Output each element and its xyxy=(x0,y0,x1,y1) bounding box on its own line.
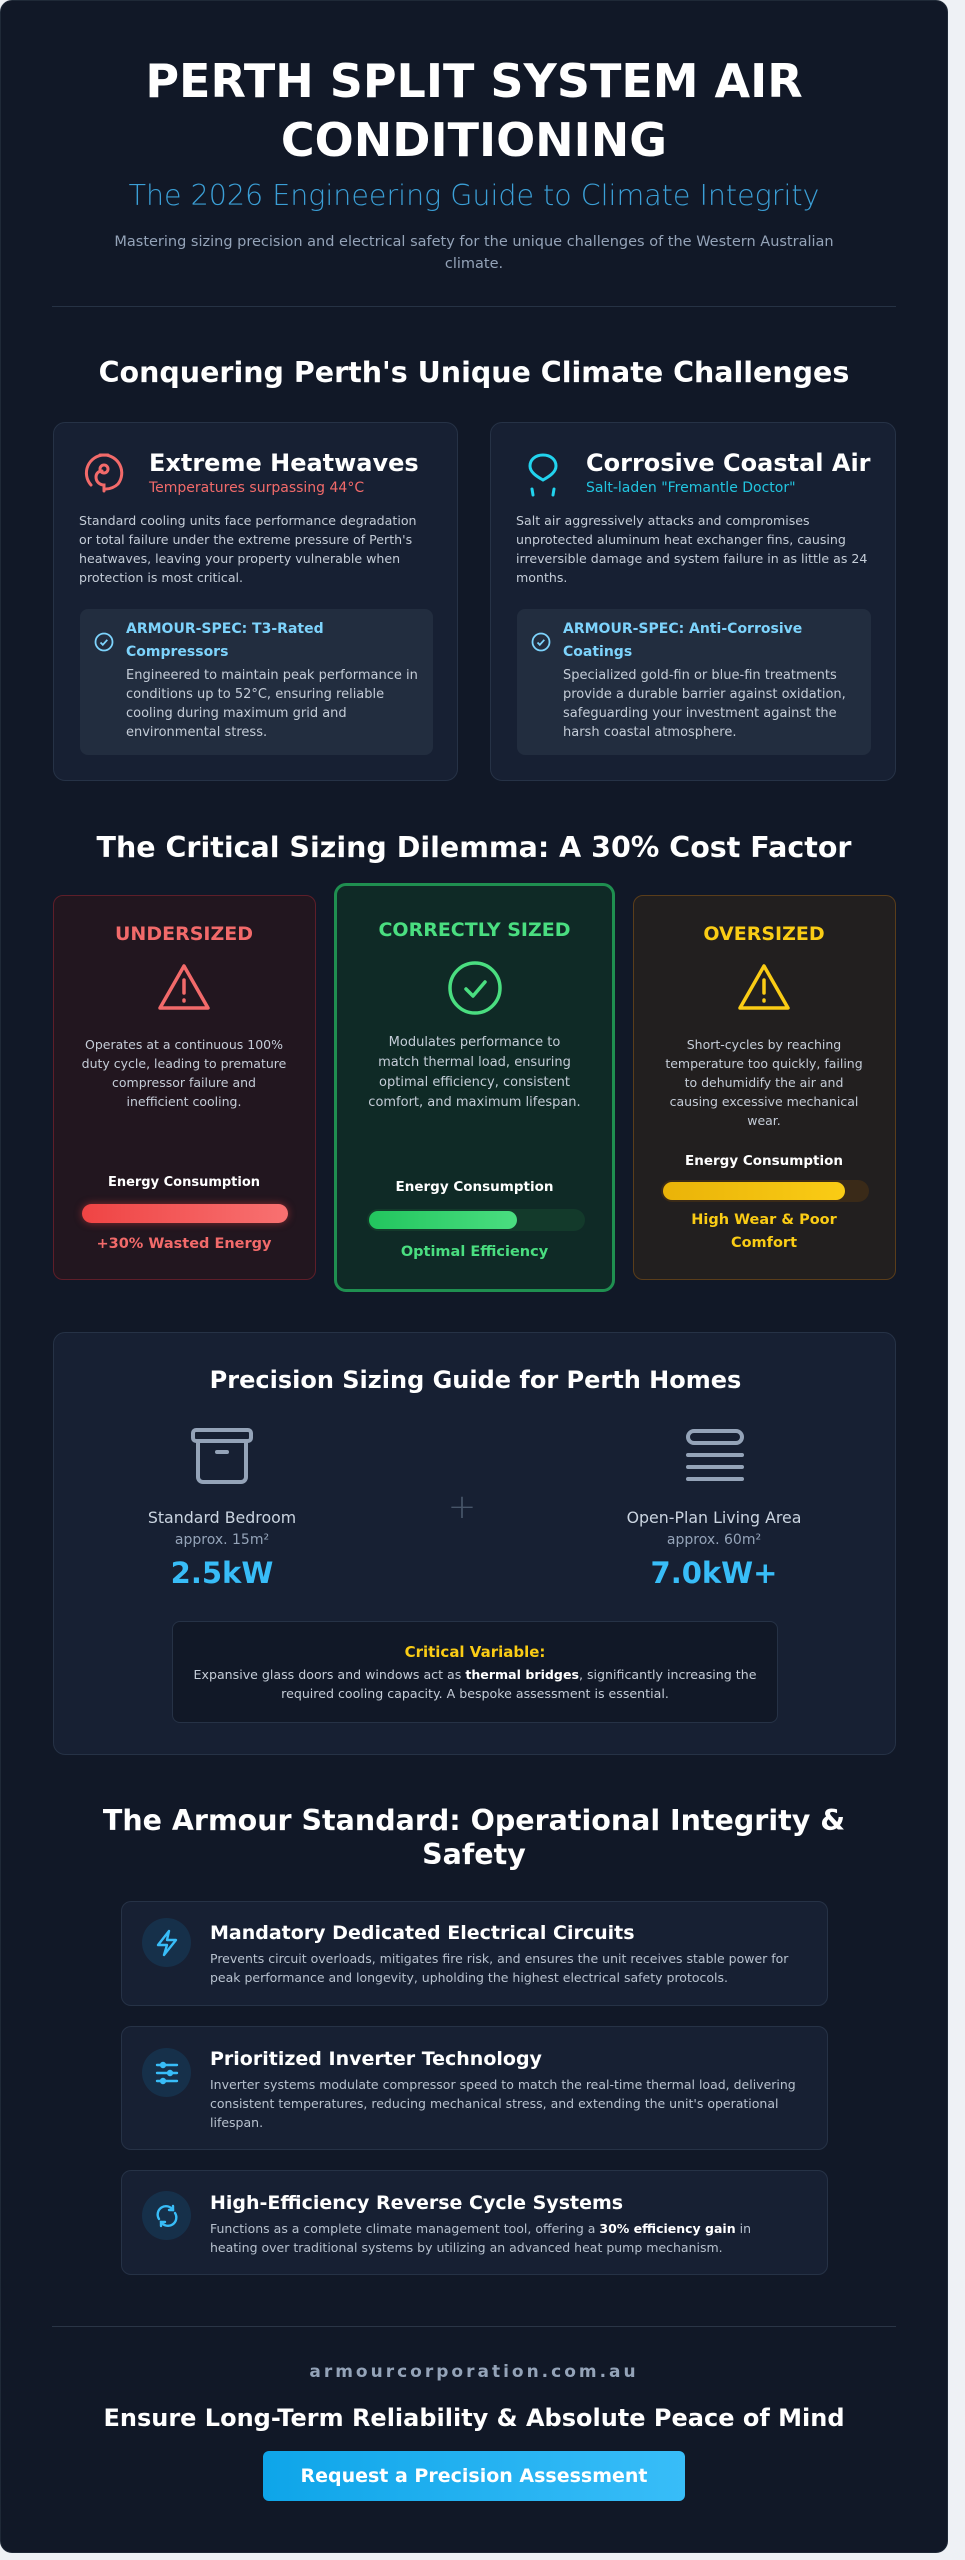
spec box: ARMOUR-SPEC: Anti-Corrosive xyxy=(563,621,802,637)
heading: armour standard: The Armour Standard: Operational Integrity & xyxy=(103,1804,845,1837)
spec box: Compressors xyxy=(126,644,228,660)
callout: critical variable xyxy=(172,1621,778,1723)
title: PERTH SPLIT SYSTEM AIR xyxy=(145,54,803,108)
panel: extreme heatwaves xyxy=(53,422,458,781)
panel: undersized: Operates at a continuous 100% xyxy=(85,1037,283,1052)
panel: reverse cycle: High-Efficiency Reverse Cycle Systems xyxy=(210,2192,623,2214)
spec box: provide a durable barrier against oxidation, xyxy=(563,687,846,702)
panel: undersized: inefficient cooling. xyxy=(127,1094,241,1109)
panel: undersized: compressor failure and xyxy=(112,1075,256,1090)
heading: Corrosive Coastal Air xyxy=(586,449,871,477)
panel: correctly sized: Modulates performance to xyxy=(389,1035,560,1050)
panel: dedicated circuits xyxy=(121,1901,828,2006)
panel: dedicated circuits: Mandatory Dedicated Electrical Circuits xyxy=(210,1922,635,1944)
panel: reverse cycle xyxy=(121,2170,828,2275)
spec box: Specialized gold-fin or blue-fin treatments xyxy=(563,668,837,683)
spec box xyxy=(80,609,433,755)
heading: armour standard xyxy=(103,1804,845,1871)
panel: oversized: OVERSIZED xyxy=(703,923,825,945)
heading: Precision Sizing Guide for Perth Homes xyxy=(210,1366,741,1394)
callout: critical variable: required cooling capacity. A bespoke assessment is essential. xyxy=(281,1686,669,1701)
title xyxy=(145,54,803,167)
bar: undersized energy xyxy=(82,1204,288,1223)
heading: sizing dilemma: The Critical Sizing Dilemma: A 30% Cost Factor xyxy=(96,831,851,864)
panel: undersized: duty cycle, leading to premature xyxy=(82,1056,286,1071)
panel: correctly sized: comfort, and maximum lifespan. xyxy=(368,1095,581,1110)
subtitle: The 2026 Engineering Guide to Climate Integrity xyxy=(129,179,819,212)
text: irreversible damage and system failure in as little as 24 xyxy=(516,551,867,566)
panel: oversized: causing excessive mechanical xyxy=(670,1094,858,1109)
text xyxy=(79,513,417,585)
bar: correct energy xyxy=(367,1209,585,1231)
subheading: Salt-laden "Fremantle Doctor" xyxy=(586,480,796,496)
website url: armourcorporation.com.au xyxy=(309,2362,639,2382)
title: CONDITIONING xyxy=(281,113,667,167)
text: months. xyxy=(516,570,567,585)
icon: sliders xyxy=(142,2048,191,2097)
icon: coastal xyxy=(528,454,558,496)
callout: critical variable: Critical Variable: xyxy=(405,1643,545,1661)
panel: correctly sized: Optimal Efficiency xyxy=(401,1244,548,1260)
panel: reverse cycle: Functions as a complete climate management tool, offering a 30% efficiency gain in xyxy=(210,2221,751,2236)
closing tagline: Ensure Long-Term Reliability & Absolute Peace of Mind xyxy=(103,2404,844,2432)
spec box: Coatings xyxy=(563,644,632,660)
text: Salt air aggressively attacks and compromises xyxy=(516,513,810,528)
panel: inverter technology: Prioritized Inverter Technology xyxy=(210,2048,542,2070)
icon: check xyxy=(94,632,114,652)
subheading: Temperatures surpassing 44°C xyxy=(149,480,364,496)
icon: check xyxy=(532,632,550,652)
panel: inverter technology: consistent temperatures, reducing mechanical stress, and extending the unit's operational xyxy=(210,2096,778,2111)
button xyxy=(263,2451,685,2501)
spec box: ARMOUR-SPEC: T3-Rated xyxy=(126,621,324,637)
spec box: conditions up to 52°C, ensuring reliable xyxy=(126,687,384,702)
icon: lightning xyxy=(142,1918,191,1967)
panel: oversized: Comfort xyxy=(731,1235,797,1251)
panel: inverter technology: Inverter systems modulate compressor speed to match the real-time thermal load, delivering xyxy=(210,2077,796,2092)
spec box: cooling during maximum grid and xyxy=(126,706,347,721)
panel: correctly sized: optimal efficiency, consistent xyxy=(379,1075,570,1090)
callout: critical variable: Expansive glass doors and windows act as thermal bridges, significantly increasing the xyxy=(194,1667,756,1682)
panel: dedicated circuits: Prevents circuit overloads, mitigates fire risk, and ensures the unit receives stable power for xyxy=(210,1951,788,1966)
spec box: Engineered to maintain peak performance in xyxy=(126,668,418,683)
panel: undersized: +30% Wasted Energy xyxy=(96,1236,272,1252)
icon: warning xyxy=(738,964,790,1010)
text: heatwaves, leaving your property vulnerable when xyxy=(79,551,400,566)
bedroom stats xyxy=(148,1508,296,1590)
panel: inverter technology xyxy=(121,2026,828,2150)
heading: Extreme Heatwaves xyxy=(149,449,419,477)
bar: oversized energy xyxy=(661,1180,869,1202)
heading: armour standard: Safety xyxy=(422,1838,526,1871)
spec box: safeguarding your investment against the xyxy=(563,706,837,721)
text xyxy=(516,513,867,585)
intro text xyxy=(114,234,834,272)
panel: corrosive coastal air xyxy=(490,422,896,781)
panel: undersized: UNDERSIZED xyxy=(115,923,253,945)
icon: living area xyxy=(686,1429,744,1481)
intro text: Mastering sizing precision and electrical safety for the unique challenges of the Western Australian xyxy=(114,234,834,250)
heading: climate challenges: Conquering Perth's Unique Climate Challenges xyxy=(99,356,849,389)
button: Request a Precision Assessment xyxy=(300,2465,648,2487)
icon: check circle xyxy=(448,961,502,1015)
panel: correctly sized: Energy Consumption xyxy=(396,1179,553,1195)
panel: correctly sized: CORRECTLY SIZED xyxy=(378,919,571,941)
panel: oversized: to dehumidify the air and xyxy=(685,1075,843,1090)
panel: undersized: Energy Consumption xyxy=(108,1175,260,1190)
panel: oversized: wear. xyxy=(747,1113,781,1128)
text: protection is most critical. xyxy=(79,570,243,585)
panel: oversized: Energy Consumption xyxy=(685,1153,843,1169)
panel: precision sizing guide xyxy=(53,1332,896,1755)
text: or total failure under the extreme pressure of Perth's xyxy=(79,532,412,547)
living area stats: 7.0kW+ xyxy=(651,1556,777,1590)
text: unprotected aluminum heat exchanger fins, causing xyxy=(516,532,846,547)
spec box xyxy=(517,609,871,755)
panel: correctly sized: match thermal load, ensuring xyxy=(378,1055,571,1070)
spec box: environmental stress. xyxy=(126,725,267,740)
panel: inverter technology: lifespan. xyxy=(210,2115,263,2130)
text: Standard cooling units face performance degradation xyxy=(79,513,417,528)
icon: heat xyxy=(84,454,124,492)
icon: bedroom xyxy=(191,1428,253,1484)
living area stats: Open-Plan Living Area xyxy=(627,1508,801,1527)
panel: reverse cycle: heating over traditional systems by utilizing an advanced heat pump mechanism. xyxy=(210,2240,723,2255)
icon: plus: + xyxy=(448,1487,476,1527)
spec box: harsh coastal atmosphere. xyxy=(563,725,736,740)
living area stats xyxy=(627,1508,801,1590)
icon: warning xyxy=(158,964,210,1010)
panel: oversized: temperature too quickly, failing xyxy=(665,1056,863,1071)
icon: cycle xyxy=(142,2191,191,2240)
panel: oversized: High Wear & Poor xyxy=(691,1212,837,1228)
panel: correctly sized xyxy=(334,883,615,1292)
bedroom stats: Standard Bedroom xyxy=(148,1508,296,1527)
bedroom stats: approx. 15m² xyxy=(175,1532,269,1548)
bedroom stats: 2.5kW xyxy=(171,1556,273,1590)
panel: dedicated circuits: peak performance and longevity, upholding the highest electrical safety protocols. xyxy=(210,1970,728,1985)
panel: oversized: Short-cycles by reaching xyxy=(687,1037,841,1052)
panel: undersized xyxy=(53,895,316,1280)
intro text: climate. xyxy=(445,256,503,272)
living area stats: approx. 60m² xyxy=(667,1532,761,1548)
panel: oversized xyxy=(633,895,896,1280)
